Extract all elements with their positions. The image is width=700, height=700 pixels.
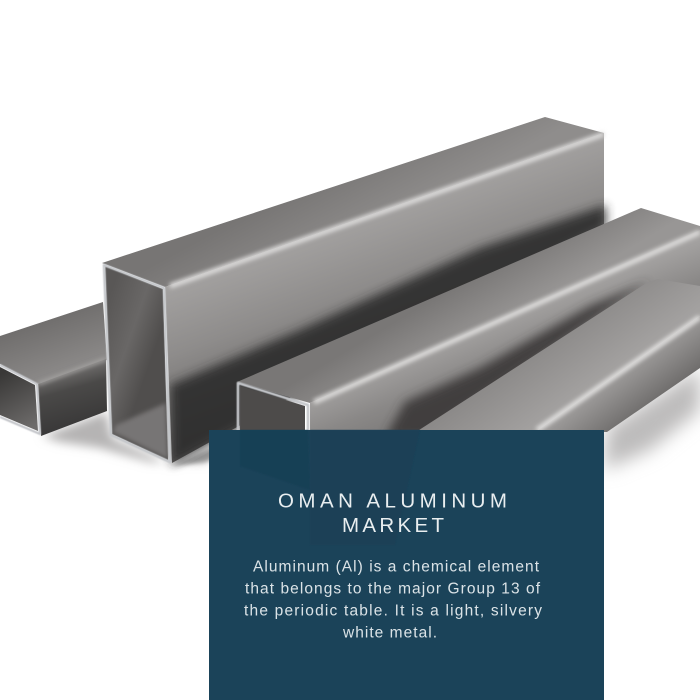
left tube opening xyxy=(0,367,38,431)
large tube side face xyxy=(165,133,604,463)
back tube surface xyxy=(416,279,700,432)
front tube highlight xyxy=(314,232,700,402)
panel title xyxy=(278,490,507,537)
ground shadows xyxy=(42,368,700,470)
panel description: that belongs to the major Group 13 of xyxy=(245,580,541,598)
panel title: OMAN ALUMINUM xyxy=(278,490,507,512)
left tube rim xyxy=(0,365,40,434)
large tube top face xyxy=(102,117,604,287)
panel background xyxy=(209,430,604,700)
right tubes xyxy=(237,208,700,438)
wedge shadow xyxy=(385,281,650,438)
panel description: white metal. xyxy=(342,624,437,642)
front tube opening xyxy=(240,386,305,432)
left tube top face xyxy=(0,302,107,384)
panel title: MARKET xyxy=(342,514,444,537)
left tube side face xyxy=(38,359,107,436)
large tube rim xyxy=(104,265,170,462)
left tube xyxy=(0,302,107,436)
panel description: Aluminum (Al) is a chemical element xyxy=(253,558,540,576)
shadow cast on large tube xyxy=(170,205,606,465)
front tube rim xyxy=(238,383,308,432)
back tube highlight xyxy=(537,317,700,430)
front tube side face xyxy=(310,230,700,432)
large tube xyxy=(102,117,606,465)
large tube opening xyxy=(105,266,168,460)
info panel xyxy=(209,430,604,700)
large tube highlight xyxy=(170,134,604,286)
panel description: the periodic table. It is a light, silvery xyxy=(244,602,542,620)
panel description xyxy=(244,558,542,642)
front tube top face xyxy=(237,208,700,403)
faint tube shapes through panel xyxy=(240,430,310,490)
back tube side xyxy=(535,316,700,432)
